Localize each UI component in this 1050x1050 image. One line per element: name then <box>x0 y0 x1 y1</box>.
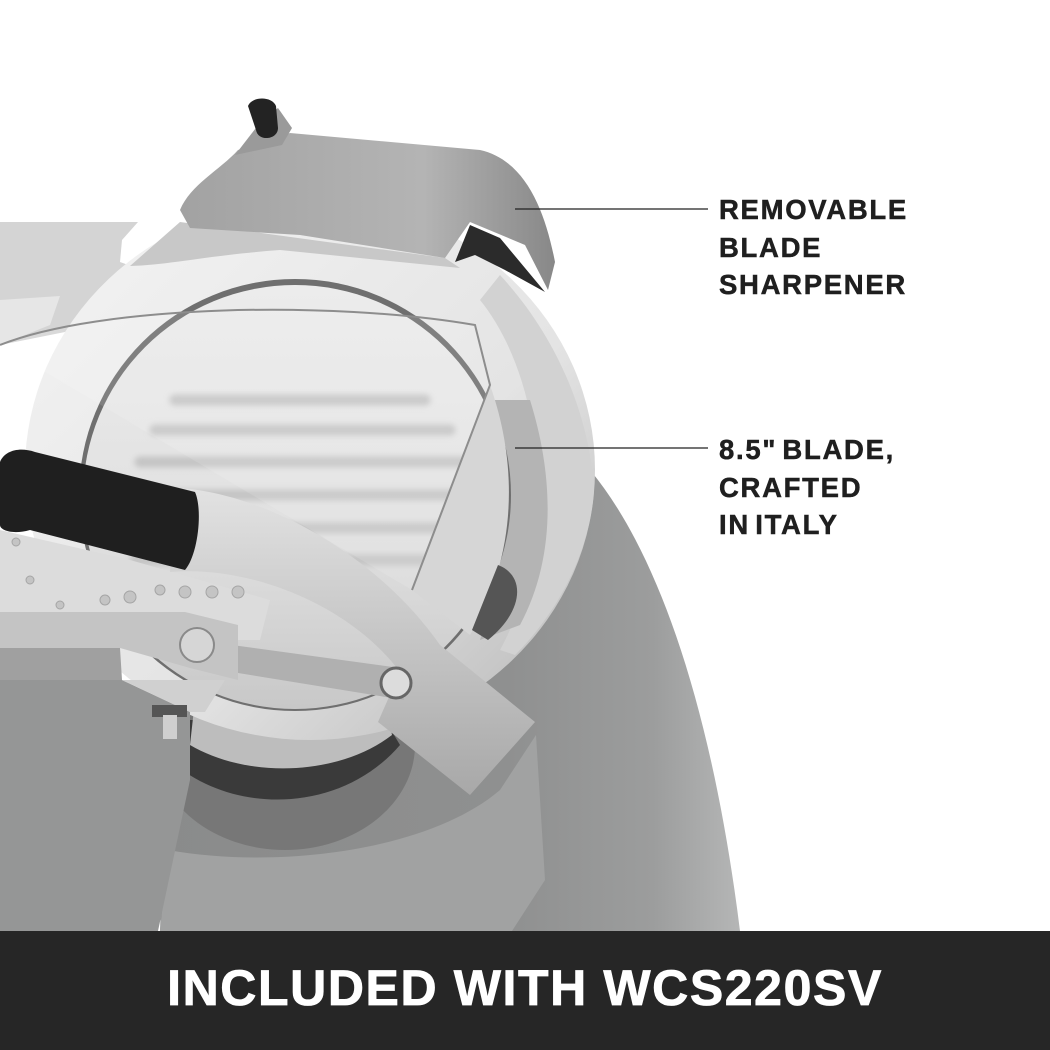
callout: blade size: 8.5" BLADE, <box>719 434 895 465</box>
pusher arm <box>170 488 535 795</box>
callout: blade size: IN ITALY <box>719 509 839 540</box>
perforated plate <box>0 530 270 640</box>
leader line: blade <box>515 447 708 449</box>
callout: blade size <box>719 434 895 540</box>
callout: removable blade sharpener <box>719 194 908 300</box>
callout: removable blade sharpener: SHARPENER <box>719 269 907 300</box>
callout: blade size: CRAFTED <box>719 472 862 502</box>
leader line: sharpener <box>515 208 708 210</box>
callout: removable blade sharpener: BLADE <box>719 232 822 262</box>
sharpener cover <box>130 98 555 292</box>
transparent guard <box>0 310 490 590</box>
blade centre disc <box>79 279 517 711</box>
blade outer ring <box>25 200 595 740</box>
slicer body <box>155 470 740 931</box>
bottom banner <box>0 931 1050 1050</box>
carriage plate <box>0 612 238 931</box>
left product tray <box>0 222 138 345</box>
bottom banner: INCLUDED WITH WCS220SV <box>167 960 883 1016</box>
callout: removable blade sharpener: REMOVABLE <box>719 194 908 225</box>
black handle <box>0 450 199 570</box>
